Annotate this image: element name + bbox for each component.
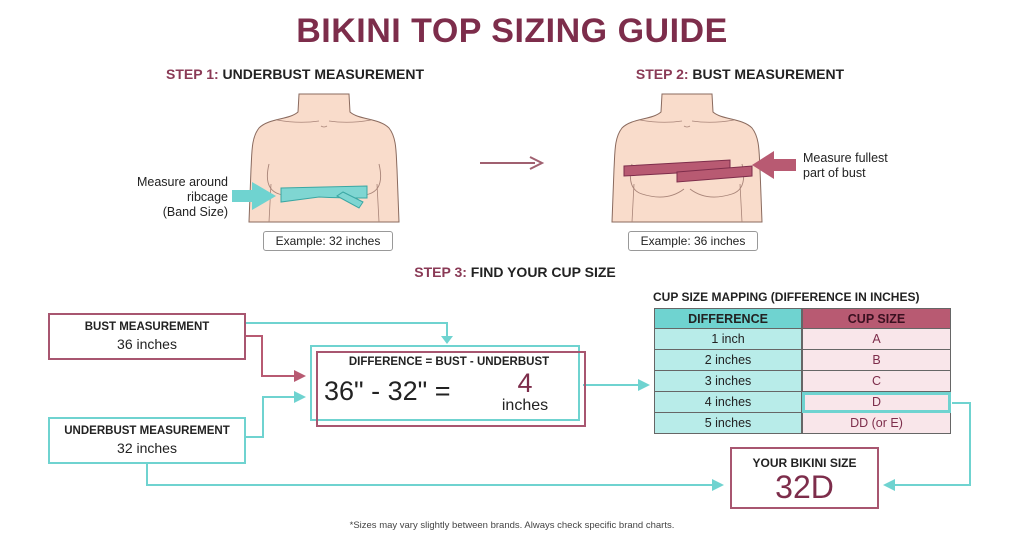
formula box: 4 — [517, 368, 533, 398]
arrow: teal left — [232, 182, 276, 210]
formula box: inches — [502, 397, 548, 414]
arrow: step1 to step2 — [480, 157, 542, 169]
underbust box: UNDERBUST MEASUREMENT — [64, 425, 230, 437]
table title: CUP SIZE MAPPING (DIFFERENCE IN INCHES) — [653, 290, 919, 304]
cup size table: 3 inches — [705, 374, 751, 388]
step 3 heading: STEP 3: FIND YOUR CUP SIZE — [414, 264, 616, 280]
cup size table: C — [872, 374, 881, 388]
result box: YOUR BIKINI SIZE — [752, 456, 856, 470]
cup size table: CUP SIZE — [848, 312, 905, 326]
result box: 32D — [775, 469, 834, 505]
result box — [730, 447, 879, 509]
bust box: BUST MEASUREMENT — [85, 321, 209, 333]
cup size table: A — [872, 332, 881, 346]
cup size table — [654, 308, 951, 434]
formula box: 36" - 32" = — [324, 376, 450, 406]
torso 2 — [612, 94, 762, 222]
torso 1 — [249, 94, 399, 222]
label: fullest bust — [803, 151, 888, 180]
label: ribcage: Measure around — [137, 175, 228, 189]
cup size table: 2 inches — [705, 353, 751, 367]
cup size table: D — [872, 395, 881, 409]
example 2: Example: 36 inches — [641, 234, 745, 248]
label: ribcage: (Band Size) — [163, 205, 228, 219]
underbust box — [48, 417, 246, 464]
cup size table: DIFFERENCE — [688, 312, 768, 326]
cup size table: B — [872, 353, 881, 367]
example 1: Example: 32 inches — [276, 234, 380, 248]
cup size table: 4 inches — [705, 395, 751, 409]
title: BIKINI TOP SIZING GUIDE — [296, 12, 728, 50]
step 2 heading: STEP 2: BUST MEASUREMENT — [636, 66, 844, 82]
formula box — [310, 345, 586, 427]
footnote: *Sizes may vary slightly between brands. Always check specific brand charts. — [350, 520, 674, 531]
underbust box: 32 inches — [117, 440, 177, 456]
step 1 heading: STEP 1: UNDERBUST MEASUREMENT — [166, 66, 424, 82]
connectors — [147, 323, 970, 485]
label: ribcage — [137, 175, 228, 219]
label: ribcage: ribcage — [187, 190, 228, 204]
example 1 — [263, 231, 393, 251]
cup size table: 5 inches — [705, 416, 751, 430]
bust box — [48, 313, 246, 360]
arrow: bust maroon — [752, 151, 796, 179]
bust box: 36 inches — [117, 336, 177, 352]
formula box: DIFFERENCE = BUST - UNDERBUST — [349, 356, 549, 368]
label: fullest bust: Measure fullest — [803, 151, 888, 165]
example 2 — [628, 231, 758, 251]
cup size table: DD (or E) — [850, 416, 903, 430]
cup size table: 1 inch — [711, 332, 745, 346]
label: fullest bust: part of bust — [803, 166, 866, 180]
